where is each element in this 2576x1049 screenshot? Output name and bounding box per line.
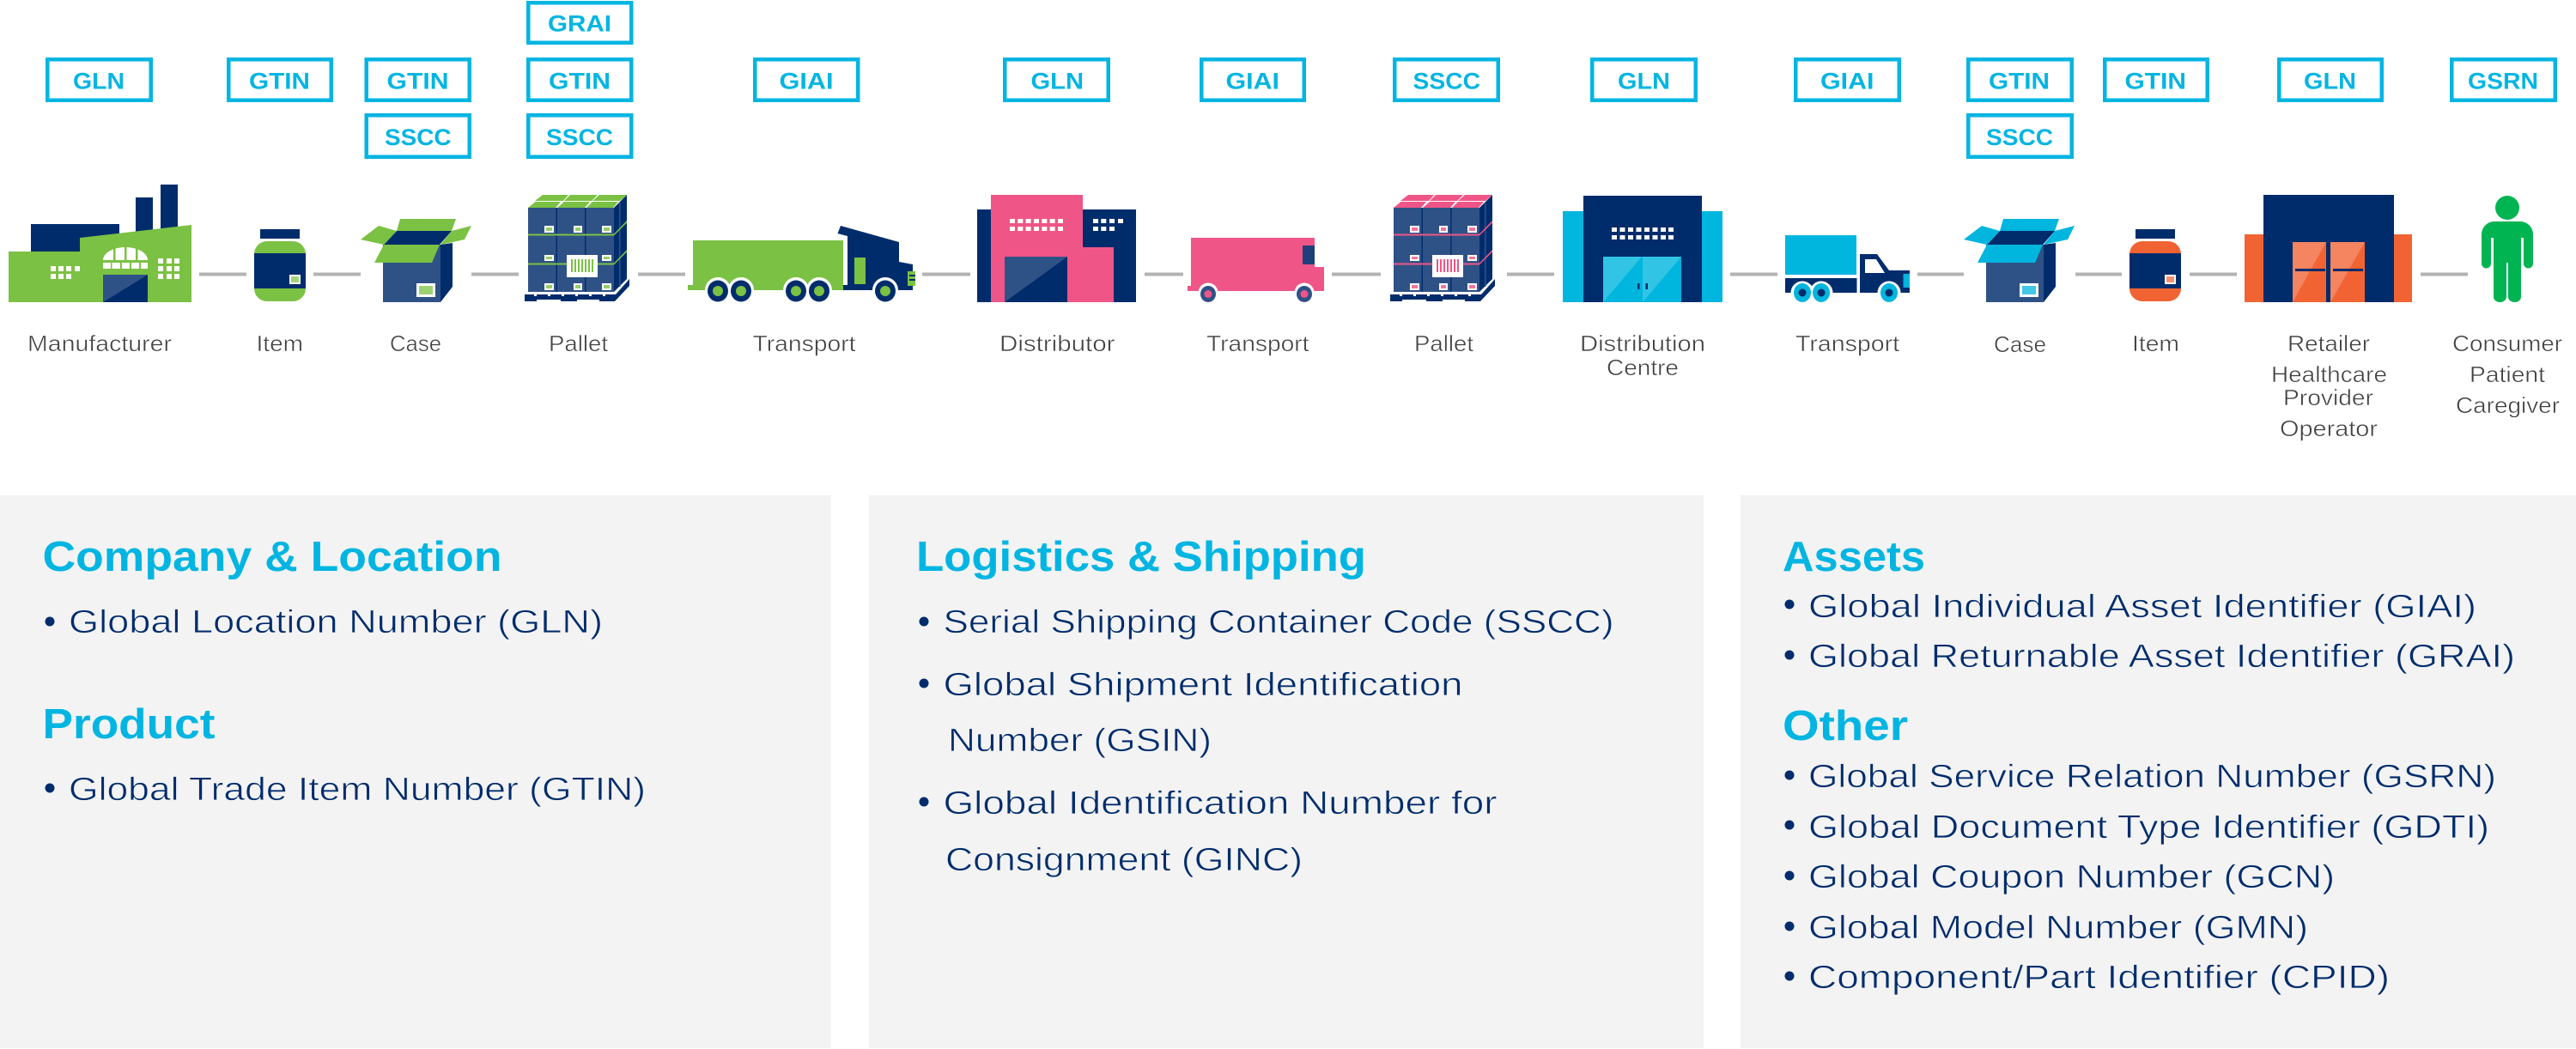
label: Retailer, Healthcare Provider, Operator: Provider [2283,385,2373,410]
icon: green lorry [688,226,915,303]
tag: GLN [47,59,151,100]
label: Item: Item [256,330,303,356]
tag: GLN [1005,59,1109,100]
stage: pallet, pink [1390,59,1498,356]
heading: Product: Product [43,701,215,748]
stage: case [361,59,471,356]
list item: GRAI: Global Returnable Asset Identifier (GRAI) [1808,639,2515,675]
icon: green open box [361,219,471,302]
list item: SSCC: Serial Shipping Container Code (SSCC) [943,604,1614,640]
icon: pink pallet of boxes [1390,195,1495,301]
connector lines between supply chain stages [199,273,2468,276]
list item: GDTI: Global Document Type Identifier (GDTI) [1808,809,2489,846]
stage: pallet [525,3,631,356]
tag: GIAI: GIAI [780,69,833,94]
tag: GLN: GLN [1030,69,1084,94]
stage: consumer [2451,59,2562,418]
label: Distribution Centre: Distribution [1580,330,1705,356]
heading: Company & Location: Company & Location [43,534,501,580]
tag: GSRN [2451,59,2555,100]
list item: GINC [919,785,1498,878]
tag: GIAI: GIAI [1226,69,1279,94]
tag: GRAI: GRAI [548,11,611,37]
tag: GLN: GLN [2304,69,2356,94]
panel: asset and other identifiers [1741,495,2576,1048]
icon: blue distribution centre [1563,196,1722,302]
icon: person [2482,196,2533,302]
tag: GIAI [755,59,858,100]
tag: GLN [1592,59,1696,100]
tag: GTIN [2105,59,2208,100]
icon: green bottle [254,229,306,301]
tag: GTIN: GTIN [1989,69,2050,94]
icon: green pallet of boxes [525,195,629,301]
tag: GLN [2279,59,2382,100]
list item: GSIN: Global Shipment Identification [943,667,1463,703]
icon: pink distributor building [977,195,1136,302]
list item: GSRN: Global Service Relation Number (GSRN) [1808,759,2496,795]
tag: GTIN [228,59,331,100]
icon: pink van [1188,238,1324,302]
label: Retailer, Healthcare Provider, Operator: Healthcare [2271,361,2387,387]
label: Transport: Transport [1795,330,1900,356]
tag: SSCC [528,115,631,157]
stage: transport by truck [1785,59,1910,356]
label: Item: Item [2132,330,2179,356]
tag: SSCC: SSCC [1986,124,2053,150]
tag: GIAI: GIAI [1820,69,1874,94]
list item: CPID: Component/Part Identifier (CPID) [1808,960,2390,996]
stage: case, blue [1964,59,2075,357]
heading: Assets: Assets [1783,534,1925,580]
label: Consumer, Patient, Caregiver: Caregiver [2456,392,2560,418]
list item: GCN: Global Coupon Number (GCN) [1808,859,2335,895]
tag: GTIN [528,59,631,100]
tag: GTIN: GTIN [249,69,310,94]
tag: GSRN: GSRN [2468,69,2538,94]
icon: blue truck [1785,235,1910,304]
label: Case: Case [1994,331,2046,357]
label: Distribution Centre [1580,330,1705,380]
label: Retailer, Healthcare Provider, Operator [2271,330,2387,441]
tag: SSCC: SSCC [1413,69,1480,94]
tag: SSCC: SSCC [546,124,613,150]
tag: SSCC [367,115,470,157]
icon: orange retail building [2245,195,2412,302]
stage: transport by van [1188,59,1324,356]
tag: GRAI [528,3,631,43]
list item: GSIN [919,667,1463,759]
list item: GMN: Global Model Number (GMN) [1808,910,2308,946]
list item: GINC: Global Identification Number for [943,785,1498,822]
icon: factory [9,185,191,302]
tag: GTIN: GTIN [386,69,448,94]
label: Retailer, Healthcare Provider, Operator: Operator [2280,415,2378,441]
stage: item [228,59,331,356]
stage: distribution centre [1563,59,1722,380]
label: Distributor: Distributor [999,330,1115,356]
label: Pallet: Pallet [1414,330,1474,356]
heading: Other: Other [1783,703,1908,749]
icon: orange bottle [2129,229,2181,301]
label: Distribution Centre: Centre [1607,355,1679,380]
list item: GINC: Consignment (GINC) [945,842,1303,878]
list item: GSIN: Number (GSIN) [948,723,1212,759]
label: Consumer, Patient, Caregiver: Consumer [2452,330,2562,356]
tag: GTIN: GTIN [549,69,611,94]
label: Retailer, Healthcare Provider, Operator: Retailer [2287,330,2370,356]
tag: GTIN [367,59,470,100]
stage: retailer [2245,59,2412,441]
tag: GTIN: GTIN [2124,69,2186,94]
list item: GTIN: Global Trade Item Number (GTIN) [69,772,646,808]
icon: blue open box [1964,219,2075,302]
tag: SSCC [1394,59,1498,100]
tag: SSCC [1968,115,2072,157]
tag: GLN: GLN [73,69,125,94]
list item: GLN: Global Location Number (GLN) [69,604,603,640]
panel: logistics and shipping identifiers [869,495,1704,1048]
tag: SSCC: SSCC [385,124,452,150]
tag: GIAI [1201,59,1304,100]
panel: company and product identifiers [0,495,831,1048]
label: Manufacturer: Manufacturer [27,330,172,356]
list item: GIAI: Global Individual Asset Identifier (GIAI) [1808,589,2476,625]
label: Consumer, Patient, Caregiver [2452,330,2562,418]
stage: item, orange [2105,59,2208,356]
label: Transport: Transport [1206,330,1309,356]
tag: GLN: GLN [1618,69,1670,94]
tag: GTIN [1968,59,2072,100]
stage: transport by lorry [688,59,915,356]
heading: Logistics & Shipping: Logistics & Shipping [916,534,1366,580]
stage: distributor [977,59,1136,356]
tag: GIAI [1795,59,1899,100]
label: Pallet: Pallet [549,330,609,356]
stage: manufacturer [9,59,191,356]
label: Case: Case [390,330,441,356]
label: Consumer, Patient, Caregiver: Patient [2470,361,2546,387]
label: Transport: Transport [752,330,856,356]
